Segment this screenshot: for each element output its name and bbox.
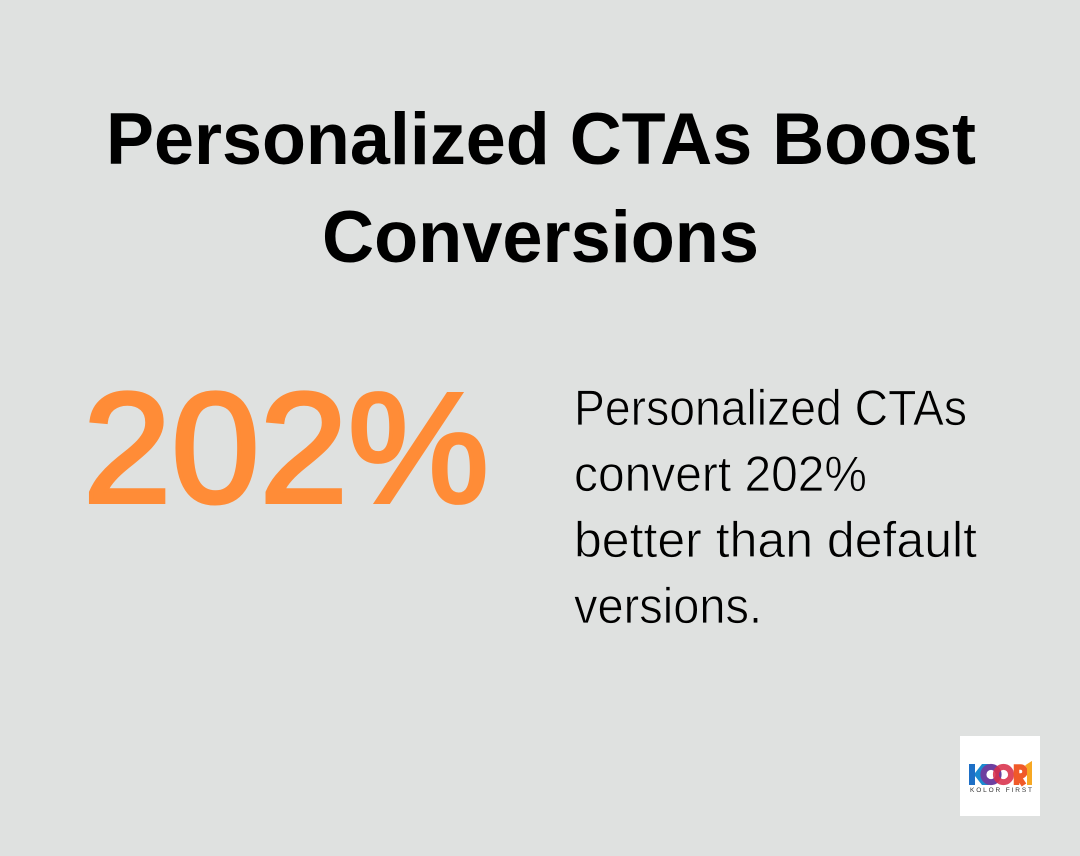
description text: convert 202%: [574, 446, 867, 502]
description text: versions.: [574, 578, 762, 634]
description text: Personalized CTAs: [574, 380, 967, 436]
title: Personalized CTAs Boost: [106, 99, 976, 180]
logo: KOOR1 Kolor First: [960, 736, 1040, 816]
big statistic: 202%: 202%: [83, 361, 489, 536]
title: [106, 99, 976, 278]
title: Conversions: [322, 197, 759, 278]
description text: [574, 380, 977, 634]
description text: better than default: [574, 512, 977, 568]
logo wordmark: [969, 764, 1030, 785]
logo tagline: KOLOR FIRST: [970, 787, 1032, 794]
